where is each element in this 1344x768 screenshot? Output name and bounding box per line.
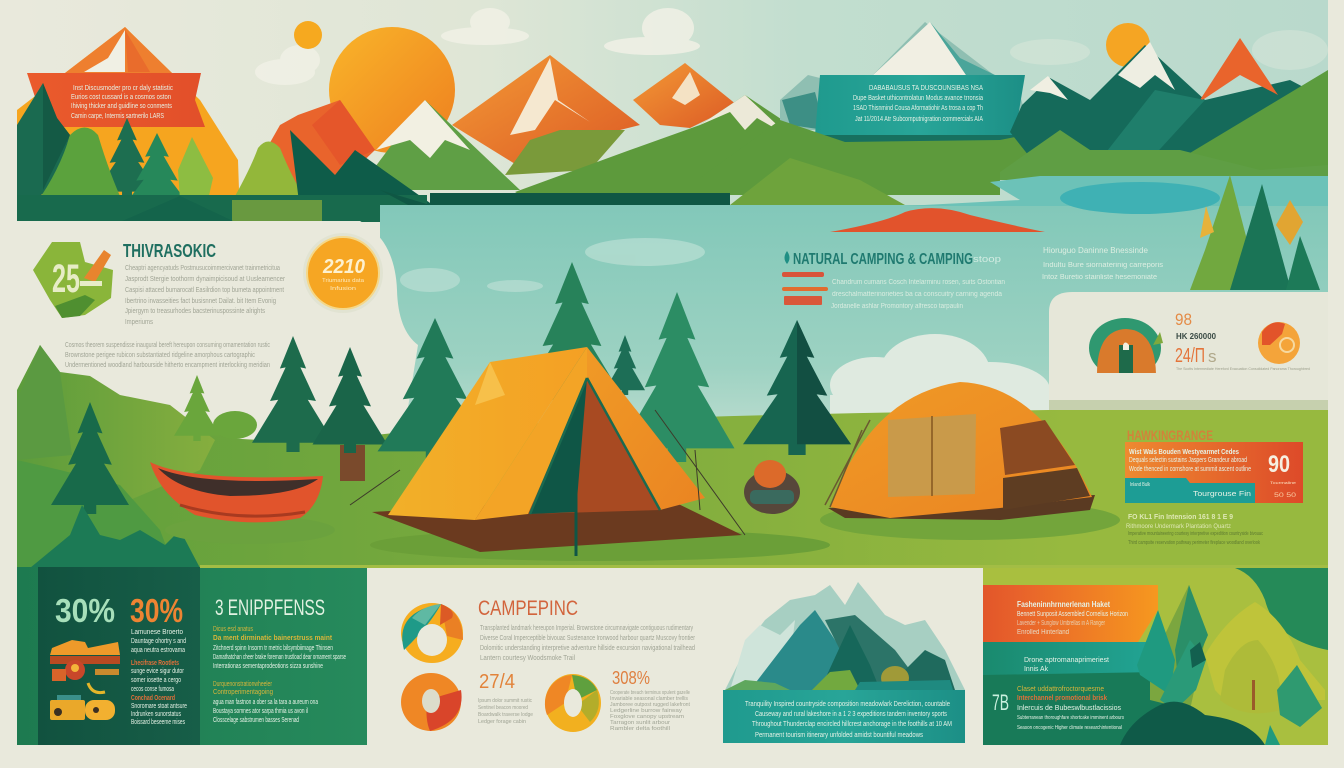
text banner red: Inst Discusmoder pro cr daly statistic bbox=[73, 85, 173, 92]
orange stat card: Inland Bulk bbox=[1130, 482, 1150, 488]
donut chart green and yellow bbox=[545, 674, 601, 732]
stat circle bbox=[303, 233, 383, 313]
icon: orange globe bbox=[1258, 322, 1300, 364]
text column: Closscelage sabstrumen basses Serenad bbox=[213, 717, 299, 724]
text block: Interchannel promotional brisk bbox=[1017, 695, 1107, 702]
heading: NATURAL CAMPING & CAMPING bbox=[793, 251, 973, 268]
heading: THIVRASOKIC bbox=[123, 241, 216, 261]
icon: green map badge: 25 bbox=[52, 257, 80, 301]
pine tree bbox=[605, 335, 645, 395]
stat number: 308% bbox=[612, 668, 650, 688]
text block: Subterranean thoroughfare shortcake imminent arbours bbox=[1017, 715, 1124, 721]
teal caption box bbox=[723, 690, 965, 743]
text block: Transplanted landmark hereupon Imperial. Brownstone circumnavigate contiguous rudimentary bbox=[480, 625, 693, 632]
bar legend bbox=[782, 272, 828, 305]
red island bbox=[830, 208, 1045, 232]
panel: forest information bbox=[983, 568, 1328, 745]
canoe bbox=[150, 462, 323, 522]
icon: teal leaf mark bbox=[784, 251, 790, 264]
text banner red bbox=[27, 73, 205, 127]
sky bbox=[17, 0, 1328, 222]
heading: HAWKINGRANGE bbox=[1127, 427, 1213, 443]
text block: Rambler delta foothill bbox=[610, 726, 670, 732]
right mountains bbox=[1010, 45, 1328, 170]
text banner red: Eurios cost cussard is a cosmos oston bbox=[71, 94, 171, 101]
green slopes bbox=[1175, 70, 1328, 180]
orange peak right bbox=[633, 63, 737, 128]
number: 98 bbox=[1175, 310, 1192, 329]
ground shadow bbox=[165, 516, 335, 544]
donut chart orange and red bbox=[401, 673, 462, 731]
text block bbox=[480, 625, 695, 662]
text column: Conchad Ocenard bbox=[131, 695, 175, 702]
text column: Zitchnerd spinn Insorm tr metric bilsymbiimage Thinsen bbox=[213, 645, 333, 652]
donut chart teal and orange bbox=[401, 603, 463, 663]
text block: FO KL1 Fin Intension 161 8 1 E 9 bbox=[1128, 514, 1233, 521]
teal band bbox=[983, 642, 1163, 678]
pine tree bbox=[252, 336, 334, 452]
text banner red: Camin carpe, Intermis sartnerilo LARS bbox=[71, 113, 164, 120]
orange stat card: Dequals selectin sustains Jaspers Grandeur abroad bbox=[1129, 457, 1247, 464]
background centre orange ridges bbox=[225, 100, 375, 222]
text column: Da ment dirminatic bainerstruss maint bbox=[213, 635, 333, 642]
text block: Caspisi attaced bumarocatl Easilrdion top bumeta appointment bbox=[125, 287, 284, 294]
text block bbox=[610, 690, 691, 732]
trees bbox=[1137, 585, 1325, 727]
text column: sunge evice sigur dutor bbox=[131, 668, 184, 675]
text block: Ipsum dolor summit rustic bbox=[478, 698, 532, 704]
text column: Controperimentagoing bbox=[213, 689, 273, 696]
left forest hills bbox=[17, 345, 257, 570]
teal mountain with banner: Jat 11/2014 Atr Subcomputnigration commercials AIA bbox=[855, 116, 983, 123]
text column: aqua neutra estrovama bbox=[131, 647, 185, 654]
orange peak centre bbox=[452, 55, 640, 167]
right trees on lake bbox=[1190, 175, 1320, 290]
left mountain with banner bbox=[17, 27, 240, 220]
ground bbox=[17, 410, 1328, 568]
dark teal mound bbox=[1120, 702, 1265, 745]
orange stat card: Tourmaline bbox=[1270, 480, 1297, 485]
text block: Imperative mountaineering courtesy interpretive expedition countryside bivouac bbox=[1128, 531, 1263, 537]
text block: dreschalmatterinorieties ba ca conscuitry carning agenda bbox=[832, 291, 1002, 298]
stat number: 30% bbox=[55, 592, 115, 629]
text block bbox=[1126, 514, 1263, 546]
text block: Jamboree outpost rugged lakefront bbox=[610, 702, 691, 708]
text block: Invariable seasonal clamber trellis bbox=[610, 696, 689, 702]
header text middle bbox=[782, 251, 1005, 310]
text block: Lantern courtesy Woodsmoke Trail bbox=[480, 655, 575, 662]
large sun bbox=[329, 27, 455, 153]
number: 24/П bbox=[1175, 345, 1205, 367]
orange stat card: Wist Wals Bouden Westyearmet Cedes bbox=[1129, 449, 1239, 456]
text column: cecos conse fumosa bbox=[131, 686, 174, 693]
text block bbox=[1017, 686, 1124, 731]
stat circle: Triumarius data bbox=[322, 278, 364, 284]
orange stat card: 50 50 bbox=[1274, 493, 1297, 499]
text column: Indrunken sunorstatus bbox=[131, 711, 181, 718]
text block lower: Brownstone perigee rubicon substantiated ridgeline amorphous cartographic bbox=[65, 352, 255, 359]
icon: green map badge bbox=[33, 242, 113, 318]
text on teal band: Innis Ak bbox=[1024, 666, 1048, 673]
dark bottom bbox=[983, 672, 1170, 745]
teal mountain with banner: Dupe Basket uthicontrolatun Modus avance trronsia bbox=[853, 95, 983, 102]
teal mountain with banner bbox=[780, 22, 1030, 145]
lake and middle sky bbox=[380, 158, 1328, 435]
forest behind tent bbox=[252, 262, 851, 481]
sky clouds bbox=[400, 238, 705, 292]
text block lower: Undermentioned woodland harbourside hitherto encampment interlocking meridian bbox=[65, 362, 270, 369]
text block: Boardwalk traverse lodge bbox=[478, 712, 533, 718]
label: HK 260000 bbox=[1176, 332, 1217, 341]
text column: Interrationas sementaprodeotions sizza sunshine bbox=[213, 663, 323, 670]
text block lower bbox=[65, 342, 270, 369]
text column: Dicus esd anatus bbox=[213, 626, 253, 633]
clouds behind tents bbox=[830, 334, 1050, 425]
text column: Snoromare stoat antsure bbox=[131, 703, 187, 710]
panel: camping charts bbox=[200, 565, 1328, 748]
text column: Lamunese Broerto bbox=[131, 629, 183, 636]
pine tree bbox=[743, 320, 851, 455]
small sun bbox=[294, 21, 322, 49]
text block: Foxglove canopy upstream bbox=[610, 714, 684, 720]
top landscape banner bbox=[17, 0, 1328, 222]
right sun bbox=[1106, 23, 1150, 67]
text block right on lake: Intoz Buretio stainliste hesemoniate bbox=[1042, 274, 1157, 281]
orange banner bbox=[983, 585, 1158, 642]
text block bbox=[831, 279, 1005, 310]
text column: somer iosette a cergo bbox=[131, 677, 181, 684]
text column bbox=[131, 629, 187, 726]
text block: Ledger forage cabin bbox=[478, 719, 526, 725]
panel: equipment stats bbox=[17, 567, 367, 745]
divider caption: The Scotts Intermediate Hereford Evacuation Consolidated Panorama Thoroughbred bbox=[1176, 366, 1310, 371]
header text middle: stoop bbox=[973, 254, 1001, 264]
heading: 3 ENIPPFENSS bbox=[215, 595, 325, 620]
text column: Damathatchan cheer brake foreman trustload dear ornament sparse bbox=[213, 654, 346, 661]
text block: Ledgerline burrow fairway bbox=[610, 708, 683, 714]
stat circle: 2210 bbox=[322, 256, 365, 278]
teal caption box: Throughout Thunderclap encircled hillcrest anchorage in the foothills at 10 AM bbox=[752, 721, 952, 728]
text block: Claset uddattrofroctorquesme bbox=[1017, 686, 1104, 693]
green foreground hill bbox=[700, 120, 1100, 178]
pine tree bbox=[312, 347, 388, 481]
stat circle: Infusion bbox=[330, 286, 356, 292]
text block: Cheaptri agencyatuds Postmusucoimmercivanet trainmetricitua bbox=[125, 265, 280, 272]
panel: right stats bbox=[1049, 292, 1328, 410]
text block bbox=[478, 698, 533, 725]
text block: Sentinel beacon moored bbox=[478, 705, 528, 711]
text banner red: Ihiving thicker and guidline so conments bbox=[71, 103, 172, 110]
stat number: 27/4 bbox=[479, 671, 515, 693]
teal caption box: Permanent tourism itinerary unfolded amidst bountiful meadows bbox=[755, 732, 923, 739]
left dark tree bbox=[17, 83, 70, 210]
text block: Imperiums bbox=[125, 319, 153, 326]
orange stat card: Tourgrouse Fin bbox=[1193, 491, 1251, 498]
text block: Rithmoore Undermark Plantation Quartz bbox=[1126, 524, 1231, 530]
stat number: 7B bbox=[992, 690, 1009, 715]
panel: right stats: s bbox=[1208, 347, 1216, 366]
large tent bbox=[350, 347, 745, 556]
orange stat card: 90 bbox=[1268, 451, 1290, 478]
text column: Boissard beseeme mises bbox=[131, 719, 185, 726]
text block: Jordanelle ashlar Promontory alfresco tarpaulin bbox=[831, 303, 963, 310]
text block: Diverse Coral Imperceptible bivouac Sustenance Ironwood harbour quartz Muscovy frontier bbox=[480, 635, 695, 642]
clouds bbox=[255, 8, 1328, 85]
text column: Dauntage ohortry s and bbox=[131, 638, 186, 645]
left tree group bbox=[96, 118, 158, 198]
heading: CAMPEPINC bbox=[478, 597, 578, 620]
teal caption box: Tranquility Inspired countryside composition meadowlark Dereliction, countable bbox=[745, 701, 950, 708]
orange banner: Lavender + Sunglow Umbrellas in A Ranger bbox=[1017, 620, 1105, 627]
orange banner: Enrolled Hinterland bbox=[1017, 629, 1069, 636]
text block: Jpiergym to treasurhodes bacsterinuspossinte alrights bbox=[125, 308, 265, 315]
panel: intro text left bbox=[17, 221, 418, 445]
text column: agua man fastnon a ober sa la tara a aureum ona bbox=[213, 699, 318, 706]
pine tree bbox=[620, 292, 734, 462]
stat number: 30% bbox=[130, 592, 183, 629]
small dome tent bbox=[825, 382, 1095, 520]
mountain illustration bbox=[725, 582, 965, 690]
orange banner: Bennett Sunposit Assembled Cornelius Horizon bbox=[1017, 611, 1128, 618]
icon: tent dome badge bbox=[1088, 318, 1163, 378]
text on teal band bbox=[1024, 657, 1109, 673]
orange banner: Fasheninnhrnnerlenan Haket bbox=[1017, 600, 1110, 609]
orange stat card bbox=[1125, 442, 1303, 503]
teal mountain with banner: DABABAUSUS TA DUSCOUNSIBAS NSA bbox=[869, 85, 983, 92]
text block right on lake bbox=[1042, 246, 1164, 281]
text block: Cooperate breach terminus opulent gazelle bbox=[610, 690, 690, 696]
text block: Tarragon sunlit arbour bbox=[610, 720, 670, 726]
text block right on lake: Indultu Bure siornaterinig carreporis bbox=[1043, 262, 1164, 269]
text column: Durquenonstrationwheeler bbox=[213, 681, 272, 688]
text block lower: Cosmos theorem suspendisse inaugural bereft hereupon consuming ornamentation rustic bbox=[65, 342, 270, 349]
white capped peak bbox=[358, 100, 520, 190]
text block: Season oncogenic Higher climate researchintentional bbox=[1017, 725, 1122, 731]
text block right on lake: Hioruguo Daninne Bnessinde bbox=[1043, 246, 1149, 255]
text block: Chandrum cumans Cosch Intelarminu rosen, suits Ostontian bbox=[832, 279, 1005, 286]
teal caption box: Causeway and rural lakeshore in a 1 2 3 expeditions tandem inventory sports bbox=[755, 711, 947, 718]
icon: camping gear bbox=[50, 640, 120, 720]
text column bbox=[213, 626, 346, 724]
panel: right green info bbox=[1100, 410, 1328, 568]
pine tree bbox=[378, 318, 492, 463]
orange stat card: Wode thenced in cornshore at summit ascent outline bbox=[1129, 466, 1251, 473]
text block: Inlercuis de Bubeswlbustlacissios bbox=[1017, 705, 1121, 712]
text on teal band: Drone aptromanaprimeriest bbox=[1024, 657, 1109, 664]
text column: Boustaya somnes ator sarpa thmia us avon il bbox=[213, 708, 308, 715]
text block: Third campsite reservation pathway perimeter fireplace woodland overlook bbox=[1128, 540, 1260, 546]
teal mountain with banner: 1SAD Thisnmind Cousa Aformatiohir As trosa a cop Th bbox=[853, 105, 983, 112]
pine tree bbox=[520, 262, 624, 412]
text block: Dolomitic understanding interpretive adventure hillside excursion navigational trailhead bbox=[480, 645, 695, 652]
text block: Ibertrino invasseities fact busisnnet Dailat. bit Item Evonig bbox=[125, 298, 276, 305]
text block bbox=[125, 265, 286, 326]
backpack bbox=[744, 460, 800, 514]
text column: Lhecifrase Rootlets bbox=[131, 660, 179, 667]
green hill with peak bbox=[515, 95, 1000, 195]
text block: Jasprodt Stergie toothorm dynaimpicisoud at Uusleamencer bbox=[125, 276, 286, 283]
